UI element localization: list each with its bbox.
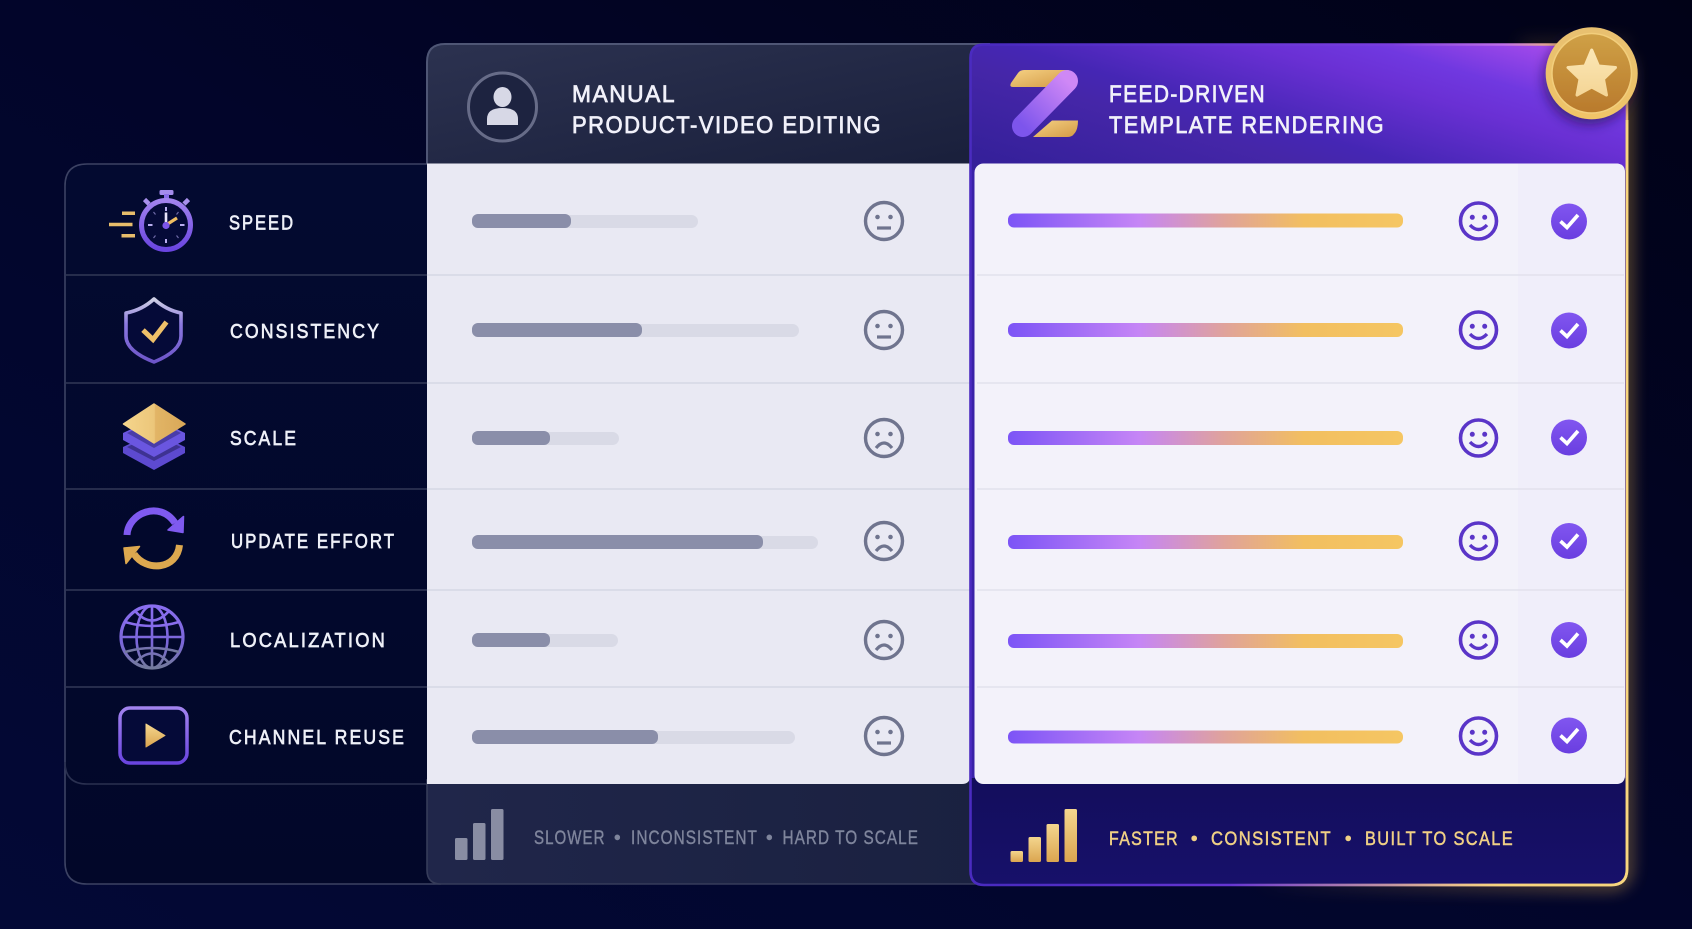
icon: sad face <box>866 522 902 560</box>
manual summary <box>534 828 919 849</box>
score bar <box>1008 323 1403 337</box>
icon: neutral face <box>866 312 902 348</box>
row label: consistency: CONSISTENCY <box>230 321 381 343</box>
score bar <box>1008 431 1403 445</box>
row label: speed <box>109 190 295 250</box>
row: consistency feed <box>1008 312 1587 348</box>
feed summary: • <box>1345 829 1353 850</box>
row: consistency manual <box>472 312 902 348</box>
icon: check badge <box>1551 312 1587 348</box>
row: scale manual <box>472 420 902 456</box>
manual heading <box>572 81 882 139</box>
manual summary: SLOWER <box>534 828 606 849</box>
icon: check badge <box>1551 622 1587 658</box>
row label: update effort <box>124 511 396 566</box>
row: update effort manual <box>472 522 902 560</box>
icon: gold bars <box>1010 809 1077 862</box>
row label: channel reuse <box>120 708 406 763</box>
icon: happy face <box>1460 203 1496 239</box>
feed header <box>970 44 1627 170</box>
row: localization manual <box>472 622 902 658</box>
icon: happy face <box>1460 523 1496 559</box>
icon: play frame <box>120 708 187 763</box>
row label: scale: SCALE <box>230 428 298 450</box>
score bar <box>1008 535 1403 549</box>
row label: channel reuse: CHANNEL REUSE <box>229 727 406 749</box>
row label: update effort: UPDATE EFFORT <box>231 531 396 553</box>
icon: check badge <box>1551 523 1587 559</box>
score bar <box>472 633 618 647</box>
icon: refresh arrows <box>124 511 184 566</box>
icon: globe <box>121 606 183 668</box>
row: speed manual <box>472 202 902 240</box>
feed footer <box>970 778 1627 885</box>
score bar <box>1008 730 1403 744</box>
icon: person <box>468 73 536 141</box>
icon: sad face <box>866 622 902 658</box>
score bar <box>1008 214 1403 228</box>
manual rows body <box>427 164 970 784</box>
row: scale feed <box>1008 420 1587 456</box>
icon: grey bars <box>455 809 504 860</box>
panel: row labels <box>65 164 440 884</box>
manual header <box>427 44 990 164</box>
row: update effort feed <box>1008 523 1587 559</box>
icon: Z logo <box>1010 70 1078 137</box>
feed summary: BUILT TO SCALE <box>1365 829 1514 850</box>
icon: stacked layers <box>123 404 185 470</box>
icon: happy face <box>1460 420 1496 456</box>
icon: stopwatch <box>109 190 190 250</box>
feed heading: TEMPLATE RENDERING <box>1109 112 1385 139</box>
row label: scale <box>123 404 298 470</box>
row label: localization: LOCALIZATION <box>230 630 387 652</box>
feed summary: CONSISTENT <box>1211 829 1332 850</box>
score bar <box>1008 634 1403 648</box>
manual summary: INCONSISTENT <box>631 828 758 849</box>
icon: check badge <box>1551 420 1587 456</box>
icon: check badge <box>1551 204 1587 240</box>
manual footer <box>427 780 990 884</box>
row label: speed: SPEED <box>229 212 295 234</box>
score bar <box>472 535 818 549</box>
icon: happy face <box>1460 312 1496 348</box>
feed summary <box>1109 829 1514 850</box>
icon: neutral face <box>866 718 902 754</box>
row: localization feed <box>1008 622 1587 658</box>
icon: check badge <box>1551 718 1587 754</box>
column base <box>970 44 1627 885</box>
row label: consistency <box>126 299 381 362</box>
feed summary: FASTER <box>1109 829 1179 850</box>
feed heading <box>1109 81 1385 139</box>
score bar <box>472 214 698 228</box>
manual heading: MANUAL <box>572 81 676 108</box>
manual summary: • <box>614 828 622 849</box>
manual summary: • <box>766 828 774 849</box>
manual heading: PRODUCT-VIDEO EDITING <box>572 112 882 139</box>
icon: happy face <box>1460 718 1496 754</box>
score bar <box>472 431 619 445</box>
feed rows body <box>974 164 1625 784</box>
row: channel reuse feed <box>1008 718 1587 754</box>
icon: gold star coin <box>1546 27 1638 119</box>
feed summary: • <box>1191 829 1199 850</box>
column border <box>970 44 1627 885</box>
icon: shield <box>126 299 181 362</box>
row label: localization <box>121 606 387 668</box>
feed heading: FEED-DRIVEN <box>1109 81 1266 108</box>
icon: neutral face <box>866 202 902 240</box>
panel: feed-driven column <box>970 44 1627 885</box>
icon: happy face <box>1460 622 1496 658</box>
icon: sad face <box>866 420 902 456</box>
manual summary: HARD TO SCALE <box>782 828 919 849</box>
row: channel reuse manual <box>472 718 902 754</box>
score bar <box>472 323 799 337</box>
panel: manual column <box>427 44 990 884</box>
score bar <box>472 730 795 744</box>
row: speed feed <box>1008 203 1587 240</box>
